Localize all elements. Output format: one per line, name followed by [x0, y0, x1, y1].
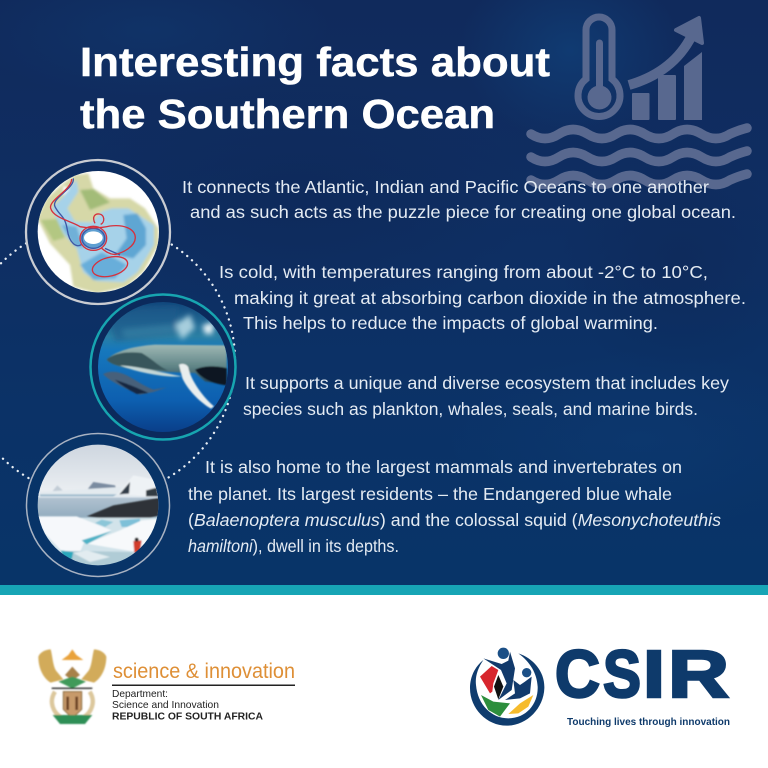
- text block: temperature fact: making it great at absorbing carbon dioxide in the atmosphere.: [234, 288, 746, 308]
- logo text: CSIR wordmark and tagline: R: [668, 637, 729, 712]
- dotted connector ring: [0, 223, 235, 497]
- logo text: science & innovation department: science & innovation: [113, 660, 295, 683]
- logo text: CSIR wordmark and tagline: S: [603, 637, 641, 712]
- text block: largest residents fact: It is also home to the largest mammals and invertebrates on: [205, 457, 682, 477]
- logo text: science & innovation department: REPUBLIC OF SOUTH AFRICA: [112, 710, 263, 722]
- photo: humpback whales underwater: [90, 294, 236, 440]
- logo text: CSIR wordmark and tagline: I: [643, 637, 665, 712]
- text block: largest residents fact: hamiltoni), dwell in its depths.: [188, 536, 399, 556]
- logo text: CSIR wordmark and tagline: Touching lives through innovation: [567, 716, 730, 728]
- text block: largest residents fact: the planet. Its largest residents – the Endangered blue whale: [188, 484, 672, 504]
- logo text: science & innovation department: Science and Innovation: [112, 699, 219, 711]
- logo text: CSIR wordmark and tagline: [555, 637, 730, 728]
- text block: temperature fact: [219, 262, 746, 333]
- text block: ecosystem fact: [243, 373, 729, 419]
- dark ocean background panel: [0, 0, 768, 586]
- logo: South African coat of arms: [38, 649, 106, 724]
- text block: temperature fact: This helps to reduce the impacts of global warming.: [243, 313, 658, 333]
- logo text: science & innovation department: [112, 660, 295, 722]
- text block: global connection fact: and as such acts as the puzzle piece for creating one global ocean.: [190, 202, 736, 222]
- text block: global connection fact: [182, 177, 736, 222]
- teal divider band: [0, 585, 768, 595]
- text block: ecosystem fact: species such as plankton, whales, seals, and marine birds.: [243, 399, 698, 419]
- photo: ocean circulation map: [26, 160, 170, 304]
- photo: Antarctic ice landscape with explorer: [26, 434, 170, 576]
- logo text: science & innovation department: Department:: [112, 688, 168, 700]
- text block: global connection fact: It connects the Atlantic, Indian and Pacific Oceans to one another: [182, 177, 709, 197]
- white footer panel: [0, 595, 768, 768]
- text block: largest residents fact: [188, 457, 721, 556]
- title: the Southern Ocean: [80, 91, 495, 137]
- icon: thermometer, rising bars and waves: [531, 17, 747, 184]
- title: [80, 39, 550, 137]
- logo: CSIR emblem: [470, 648, 544, 726]
- text block: ecosystem fact: It supports a unique and diverse ecosystem that includes key: [245, 373, 729, 393]
- text block: largest residents fact: (Balaenoptera musculus) and the colossal squid (Mesonychoteuthis: [188, 510, 721, 530]
- title: Interesting facts about: [80, 39, 550, 85]
- text block: temperature fact: Is cold, with temperatures ranging from about -2°C to 10°C,: [219, 262, 708, 282]
- logo text: CSIR wordmark and tagline: C: [555, 637, 600, 712]
